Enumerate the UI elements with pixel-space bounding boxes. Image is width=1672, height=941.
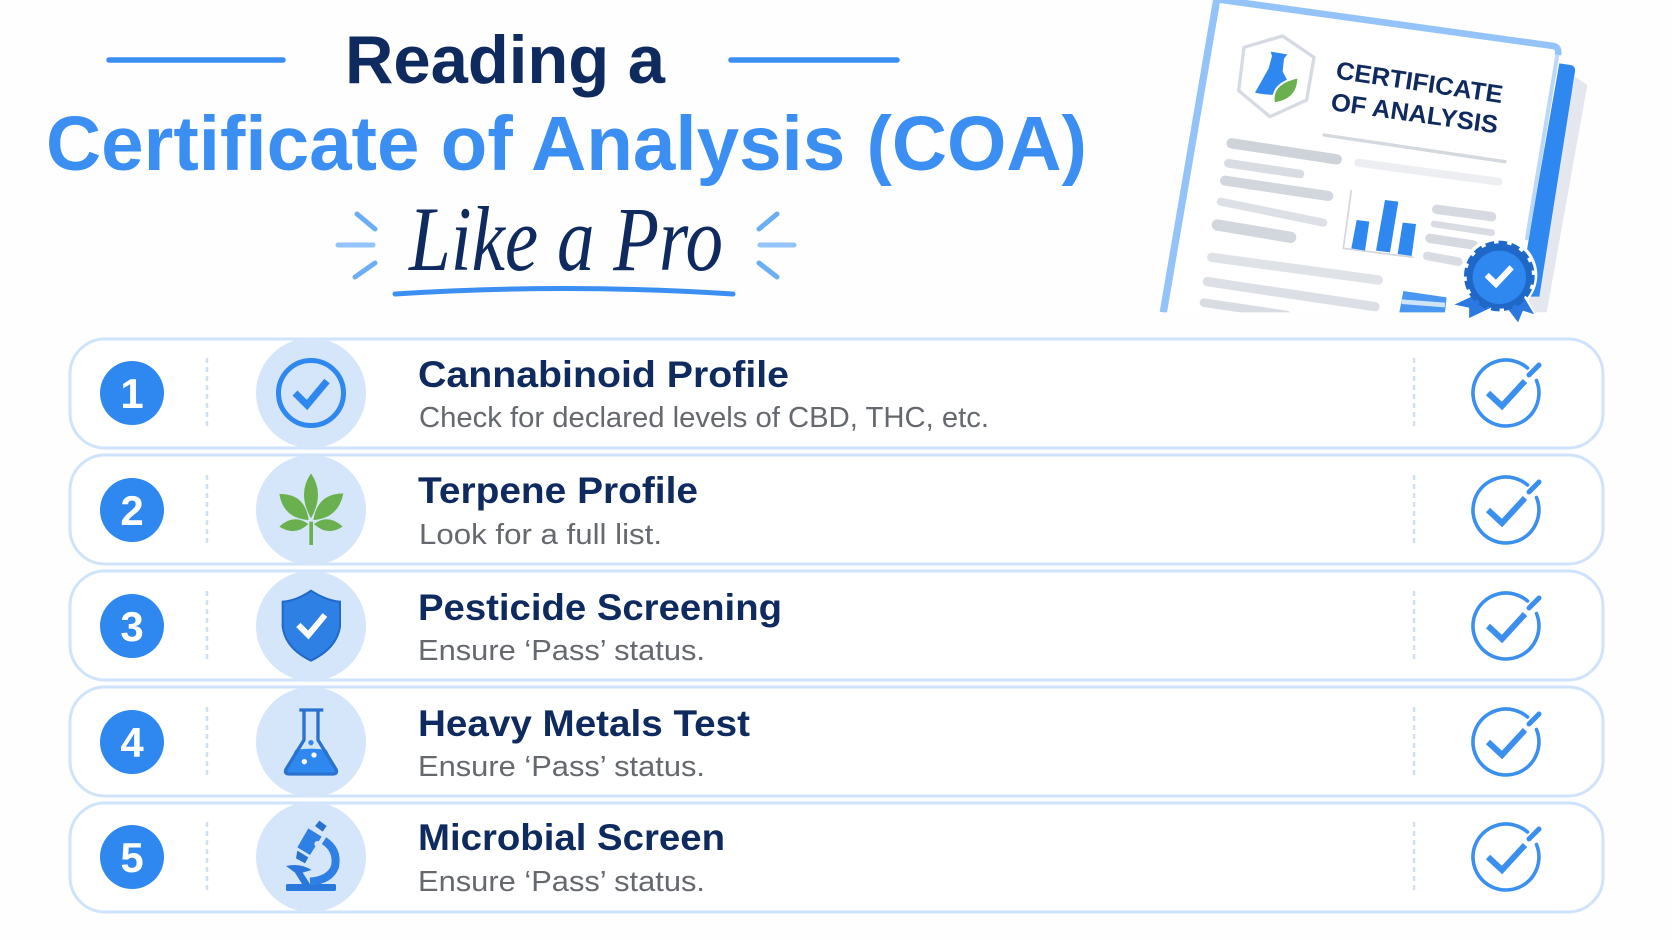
icon: check circle (256, 338, 366, 448)
stamp block (1399, 291, 1447, 312)
number badge 3 (100, 594, 164, 658)
row 1 text: Cannabinoid Profile (418, 354, 789, 395)
icon: checkmark (1473, 709, 1539, 775)
number badge 2: 2 (120, 487, 144, 534)
row 2 text: Look for a full list. (419, 519, 662, 551)
row 1 text: Check for declared levels of CBD, THC, etc. (419, 402, 989, 434)
icon: checkmark (1473, 593, 1539, 659)
row 5 text (418, 817, 725, 898)
row 3 text: Pesticide Screening (418, 587, 782, 628)
number badge 4 (100, 710, 164, 774)
underline (395, 288, 733, 294)
certificate illustration (1163, 0, 1587, 324)
row 5 text: Microbial Screen (418, 817, 725, 858)
icon: cannabis leaf (256, 455, 366, 565)
row 3: Pesticide Screening (70, 571, 1603, 681)
certificate text: CERTIFICATE (1334, 57, 1505, 109)
row 2: Terpene Profile (70, 455, 1603, 565)
icon: checkmark (1473, 824, 1539, 890)
text placeholder bars (1204, 135, 1505, 315)
row 3 text: Ensure ‘Pass’ status. (418, 635, 705, 667)
row 4 text: Heavy Metals Test (418, 703, 750, 744)
icon: microscope (256, 802, 366, 912)
row 2 text (418, 470, 698, 551)
number badge 1 (100, 361, 164, 425)
row 4: Heavy Metals Test (70, 687, 1603, 797)
icon: checkmark (1473, 477, 1539, 543)
icon: flask (256, 687, 366, 797)
number badge 2 (100, 478, 164, 542)
sparks (338, 214, 794, 277)
heading line: Certificate of Analysis (COA): Certificate of Analysis (COA) (46, 101, 1087, 187)
heading line: Reading a: Reading a (345, 22, 666, 98)
mini bar chart (1343, 190, 1416, 257)
row 5: Microbial Screen (70, 802, 1603, 912)
certificate text: OF ANALYSIS (1329, 88, 1500, 139)
row 3 text (418, 587, 782, 667)
icon: checkmark (1473, 360, 1539, 426)
number badge 5 (100, 825, 164, 889)
number badge 1: 1 (120, 370, 144, 417)
hexagon logo (1239, 36, 1314, 117)
row 1 text (418, 354, 989, 434)
row 4 text: Ensure ‘Pass’ status. (418, 751, 705, 783)
row 5 text: Ensure ‘Pass’ status. (418, 866, 705, 898)
number badge 5: 5 (120, 834, 144, 881)
number badge 4: 4 (120, 719, 144, 766)
heading line: Like a Pro: Like a Pro (407, 188, 723, 290)
certificate text (1329, 57, 1505, 139)
row 4 text (418, 703, 750, 783)
row 1: Cannabinoid Profile (70, 338, 1603, 448)
row 2 text: Terpene Profile (418, 470, 698, 511)
award badge (1452, 237, 1537, 324)
number badge 3: 3 (120, 603, 144, 650)
title (46, 22, 1087, 290)
icon: shield (256, 571, 366, 681)
